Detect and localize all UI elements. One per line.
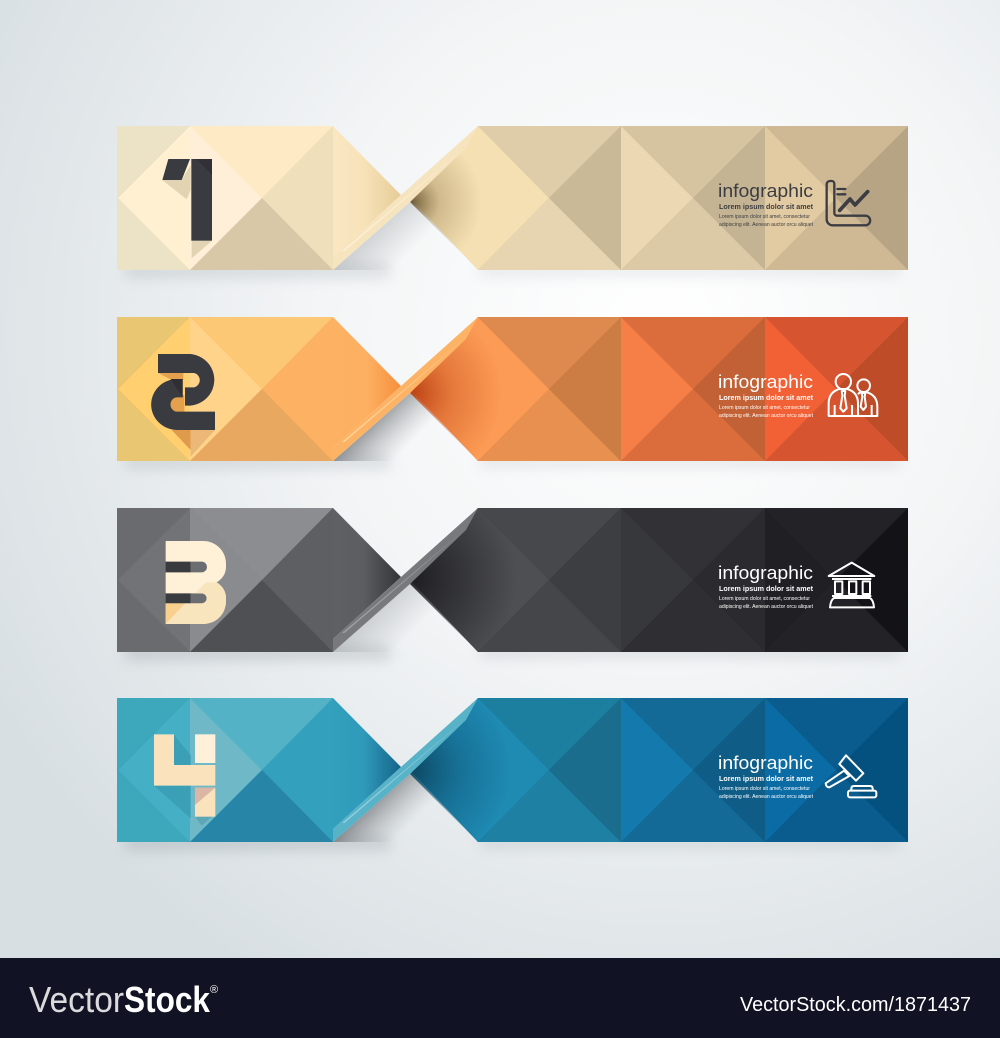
numeral 2 [151, 354, 215, 457]
fold strip [333, 126, 478, 270]
image id: VectorStock.com/1871437 [740, 994, 971, 1016]
icon: gavel [826, 755, 876, 797]
fold strip [333, 508, 478, 652]
text block: infographic [718, 563, 813, 583]
panel: banner 3 dark grey [117, 508, 908, 659]
text block: Lorem ipsum dolor sit amet [719, 774, 813, 783]
text block: adipiscing elit. Aenean auctor orcu aliquet [719, 222, 814, 228]
footer bar [0, 958, 1000, 1038]
right section [410, 126, 908, 270]
text block: Lorem ipsum dolor sit amet [719, 584, 813, 593]
text block [718, 753, 814, 800]
panel: banner 2 orange [117, 317, 908, 468]
shadow under banner 2 [125, 393, 900, 468]
right section [410, 508, 908, 652]
text block: Lorem ipsum dolor sit amet, consectetur [719, 786, 810, 792]
text block [718, 563, 814, 610]
icon: businessmen [829, 374, 877, 416]
text block: Lorem ipsum dolor sit amet, consectetur [719, 214, 810, 220]
numeral 3 [166, 541, 226, 624]
VectorStock logo: ® [210, 984, 218, 996]
shadow under banner 4 [125, 774, 900, 849]
text block: adipiscing elit. Aenean auctor orcu aliquet [719, 604, 814, 610]
shadow under banner 1 [125, 202, 900, 277]
icon: bank building [829, 563, 874, 607]
panel: banner 1 beige [117, 126, 908, 277]
icon: chart [827, 181, 870, 225]
left folded section [117, 698, 401, 842]
panel: banner 4 blue [117, 698, 908, 849]
text block: infographic [718, 372, 813, 392]
left folded section [117, 317, 401, 461]
text block: Lorem ipsum dolor sit amet [719, 393, 813, 402]
numeral 1 [162, 159, 212, 258]
right section [410, 698, 908, 842]
left folded section [117, 126, 401, 270]
text block: Lorem ipsum dolor sit amet [719, 202, 813, 211]
text block: infographic [718, 181, 813, 201]
VectorStock logo: VectorStock [29, 979, 222, 1020]
text block: Lorem ipsum dolor sit amet, consectetur [719, 405, 810, 411]
text block: infographic [718, 753, 813, 773]
numeral 4 [154, 734, 215, 826]
text block [718, 181, 814, 228]
left folded section [117, 508, 401, 652]
text block [718, 372, 814, 419]
text block: adipiscing elit. Aenean auctor orcu aliquet [719, 413, 814, 419]
shadow under banner 3 [125, 584, 900, 659]
fold strip [333, 317, 478, 461]
right section [410, 317, 908, 461]
text block: Lorem ipsum dolor sit amet, consectetur [719, 596, 810, 602]
fold strip [333, 698, 478, 842]
text block: adipiscing elit. Aenean auctor orcu aliquet [719, 794, 814, 800]
